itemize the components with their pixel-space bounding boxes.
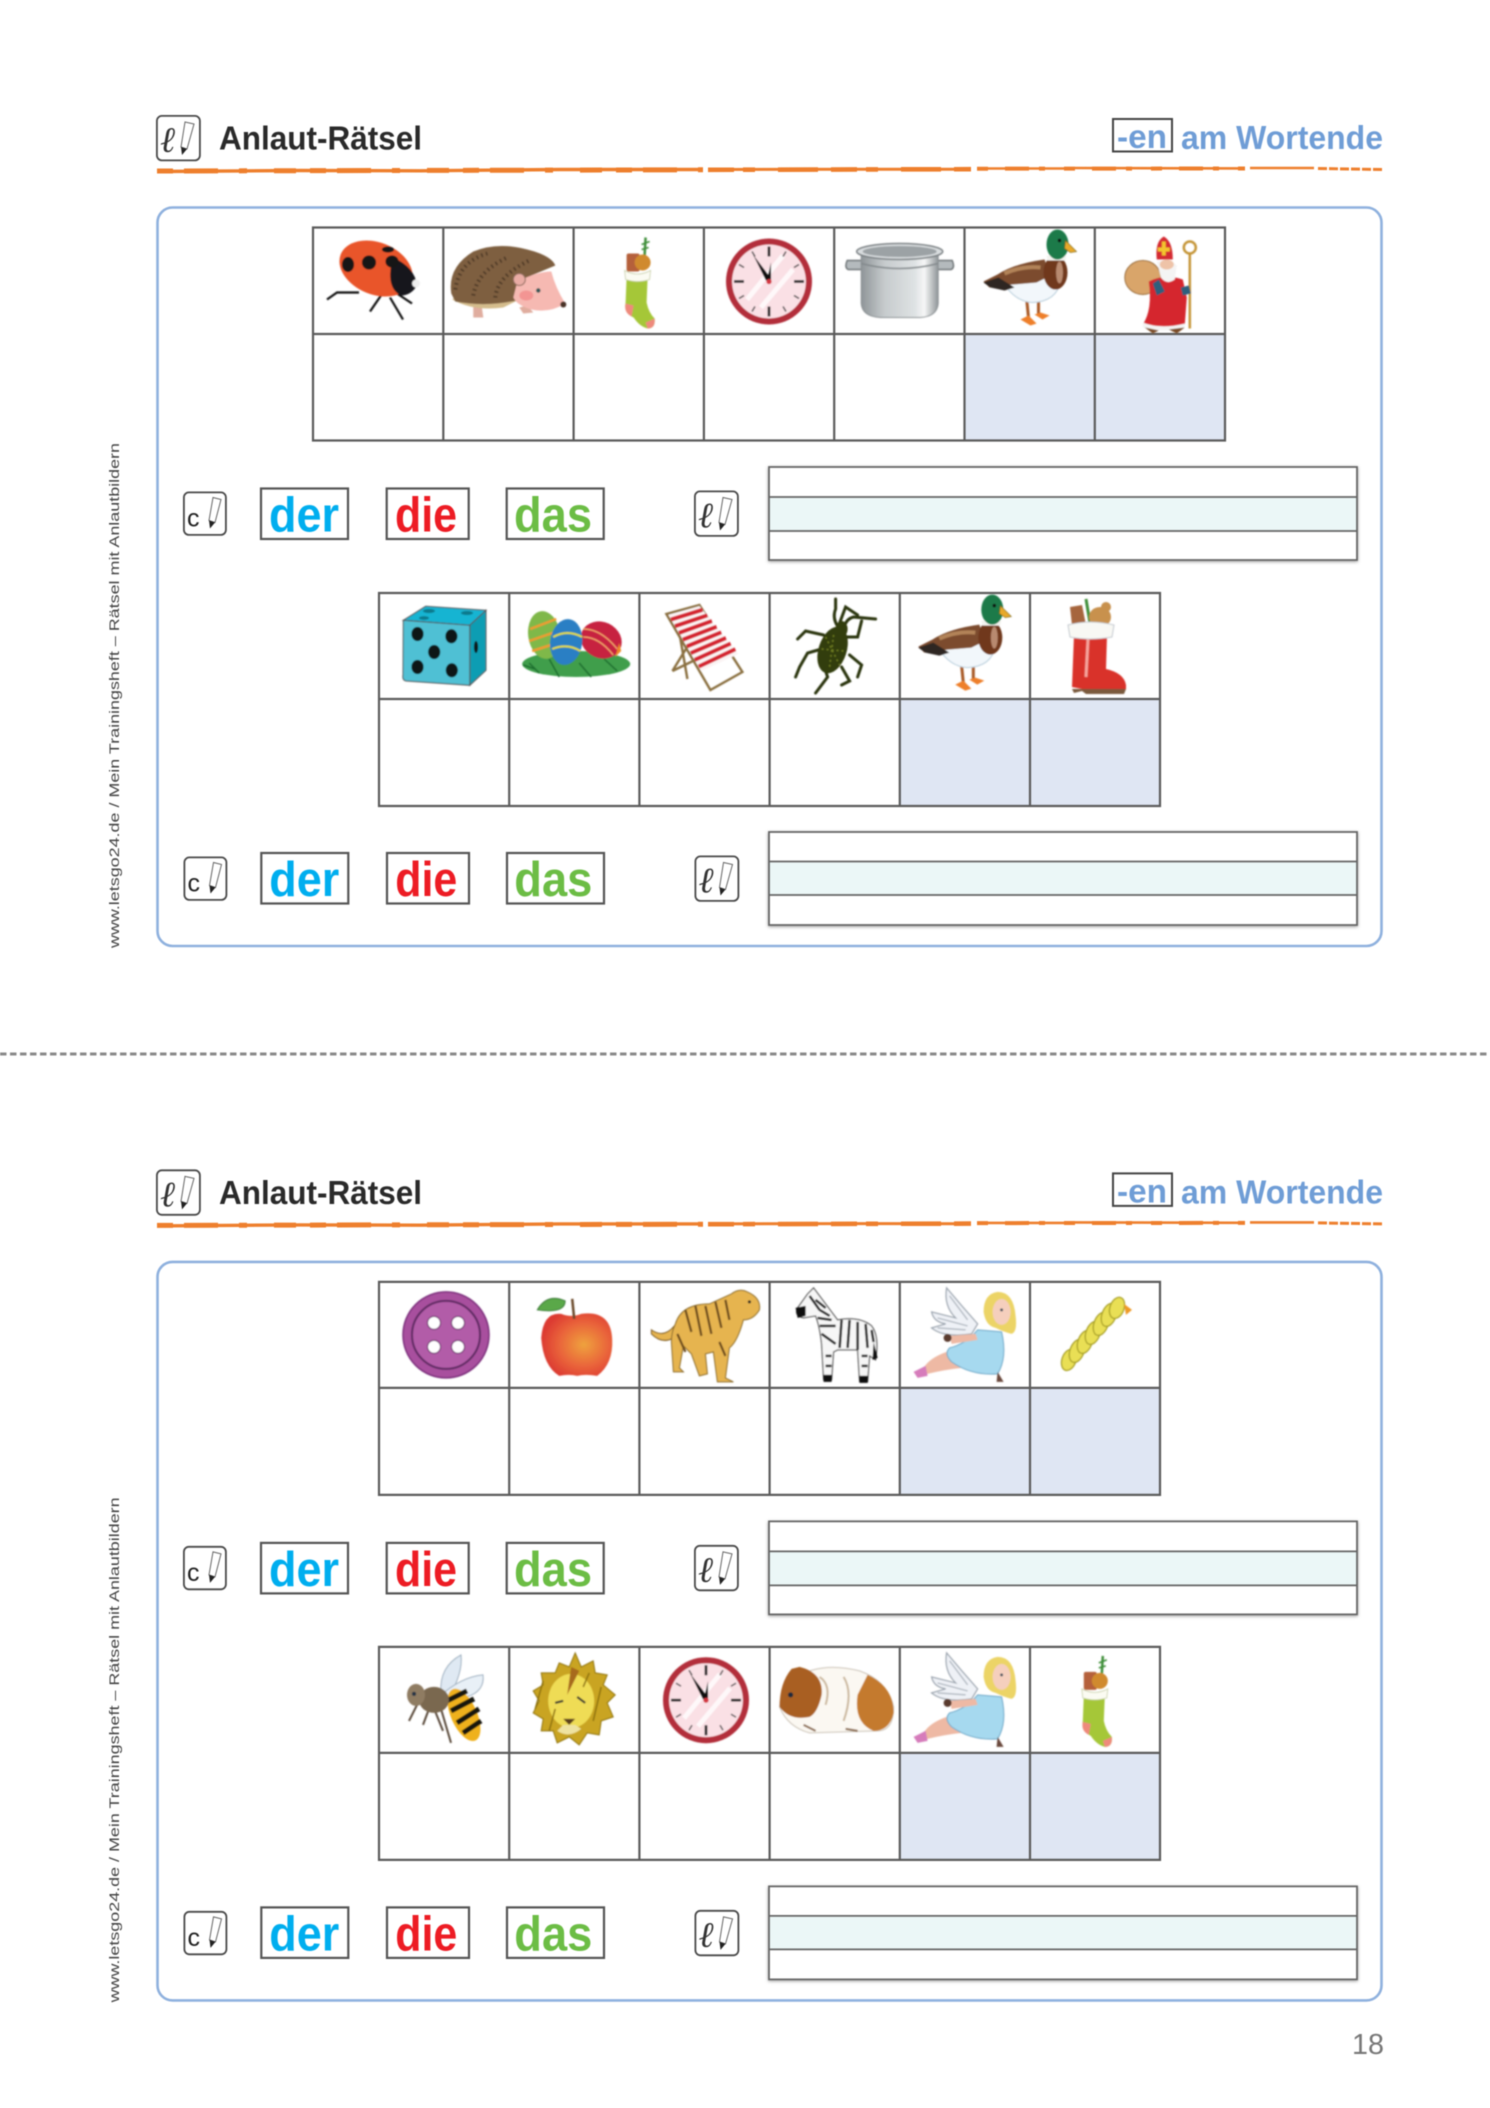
icon: stocking <box>625 238 655 328</box>
puzzle grid 3 <box>379 1282 1160 1495</box>
icon: zebra <box>796 1288 878 1383</box>
icon: deck chair <box>666 605 742 690</box>
icon: beetle <box>796 599 876 693</box>
icon: write <box>695 491 738 536</box>
topic text: am Wortende <box>1181 119 1383 156</box>
icon: tiger <box>651 1290 760 1382</box>
icon: write <box>695 1546 738 1591</box>
articles <box>261 488 604 542</box>
icon: duck <box>984 230 1076 326</box>
ending box <box>1113 119 1172 152</box>
ending text: -en <box>1117 118 1167 155</box>
icon: dice <box>403 606 486 685</box>
puzzle grid 4 <box>379 1647 1160 1860</box>
worksheet: top <box>106 116 1383 949</box>
panel frame <box>158 1262 1382 2000</box>
icon: pot <box>846 244 953 318</box>
icon: button <box>403 1292 489 1378</box>
articles <box>261 1543 604 1597</box>
answer row 3 <box>184 1521 1357 1614</box>
topic text: am Wortende <box>1181 1173 1383 1210</box>
icon: Saint Nicholas <box>1125 236 1196 334</box>
icon: hedgehog <box>451 246 566 318</box>
puzzle grid 2 <box>379 593 1160 806</box>
icon: clock <box>663 1657 749 1743</box>
answer row 2 <box>184 832 1357 925</box>
side text: www.letsgo24.de / Mein Trainingsheft – Rätsel mit Anlautbildern <box>106 1497 122 2004</box>
icon: guinea pig <box>780 1667 894 1733</box>
icon: fairy <box>914 1653 1016 1747</box>
icon: duck <box>918 595 1011 691</box>
icon: bee <box>407 1655 487 1746</box>
icon: write <box>695 1911 738 1956</box>
icon: Easter eggs <box>522 609 630 677</box>
icon: write <box>695 856 738 902</box>
writing lines <box>769 1886 1357 1979</box>
icon: tick <box>184 492 226 535</box>
writing lines <box>769 467 1357 560</box>
icon: boot <box>1068 599 1126 694</box>
title: Anlaut-Rätsel <box>219 1174 422 1211</box>
articles <box>261 1907 604 1961</box>
panel frame <box>158 208 1382 946</box>
articles <box>261 853 604 907</box>
heading icon: write <box>157 1170 200 1215</box>
heading icon: write <box>157 116 200 161</box>
icon: pasta <box>1059 1295 1132 1373</box>
ending text: -en <box>1117 1172 1167 1209</box>
worksheet: bottom <box>106 1170 1383 2004</box>
icon: tick <box>184 1912 226 1954</box>
puzzle grid 1 <box>313 228 1225 440</box>
title: Anlaut-Rätsel <box>219 120 422 156</box>
writing lines <box>769 1521 1357 1614</box>
answer row 1 <box>184 467 1357 560</box>
answer row 4 <box>184 1886 1357 1979</box>
orange rule <box>157 1222 1382 1226</box>
orange rule <box>157 168 1382 172</box>
icon: stocking <box>1082 1656 1112 1747</box>
icon: lion <box>533 1653 615 1745</box>
icon: apple <box>537 1298 612 1376</box>
side text: www.letsgo24.de / Mein Trainingsheft – Rätsel mit Anlautbildern <box>106 443 122 949</box>
icon: ladybug <box>327 230 421 320</box>
icon: tick <box>184 1547 226 1589</box>
page number: 18 <box>1352 2029 1384 2061</box>
ending box <box>1113 1173 1172 1206</box>
icon: clock <box>726 238 812 324</box>
icon: tick <box>184 857 226 900</box>
dashed cut line <box>0 1052 1490 1056</box>
icon: fairy <box>914 1288 1016 1382</box>
writing lines <box>769 832 1357 925</box>
